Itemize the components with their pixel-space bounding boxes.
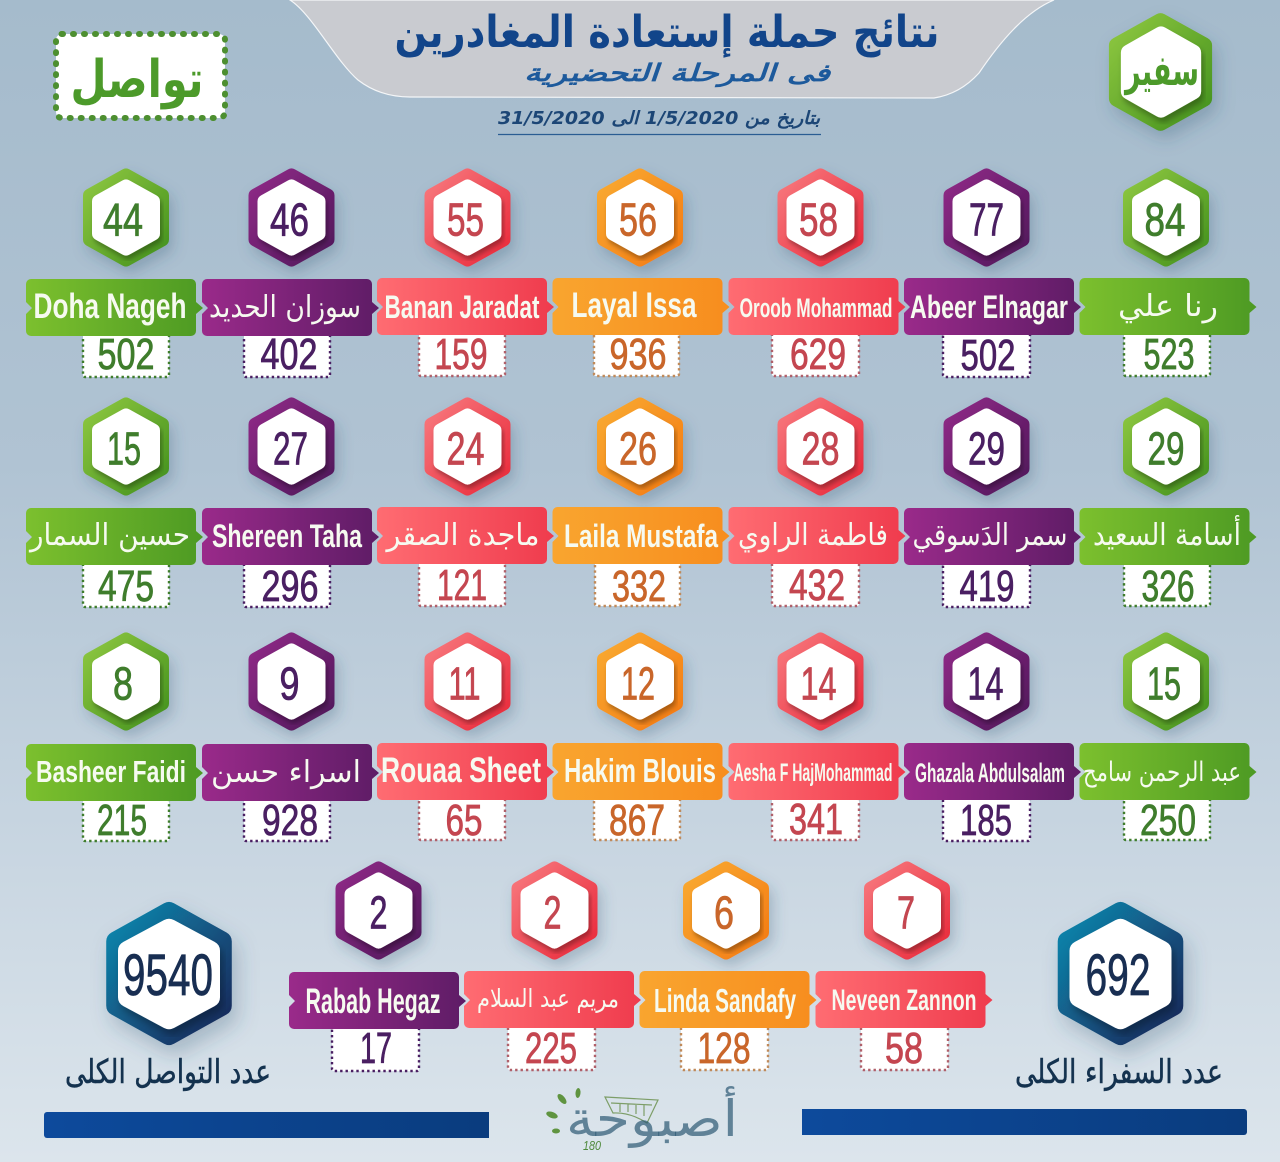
card: Abeer Elnagar — [904, 176, 1081, 380]
count box: 296 — [244, 556, 330, 611]
name ribbon: Aesha F HajMohammad: Aesha F HajMohammad — [734, 759, 892, 787]
row 4 — [289, 868, 992, 1073]
name ribbon: Abeer Elnagar — [904, 278, 1081, 335]
rank hexagon: 11: 11 — [448, 658, 480, 710]
card: Oroob Mohammad — [728, 176, 906, 379]
name ribbon: Rabab Hegaz — [289, 972, 466, 1029]
name ribbon: Neveen Zannon: Neveen Zannon — [832, 984, 976, 1017]
count box: 928 — [244, 790, 330, 845]
count box: 159: 159 — [434, 330, 488, 379]
rank hexagon: 2 — [342, 868, 414, 952]
row 3 — [26, 640, 1256, 845]
name ribbon: Doha Nageh — [26, 279, 203, 336]
logo wordmark: أصبوحة — [566, 1086, 738, 1148]
count box: 419: 419 — [960, 562, 1014, 611]
count box: 65: 65 — [446, 796, 482, 845]
card: Israa Hassan — [202, 640, 379, 845]
name ribbon: Basheer Faidi: Basheer Faidi — [36, 754, 186, 789]
card: Rouaa Sheet — [377, 640, 554, 845]
rank hexagon: 9: 9 — [280, 658, 300, 710]
name ribbon: Layal Issa: Layal Issa — [572, 286, 697, 325]
rank hexagon: 46: 46 — [270, 194, 309, 246]
count box: 17: 17 — [360, 1024, 392, 1073]
rank hexagon: 2 — [518, 868, 590, 952]
rank hexagon: 15 — [1130, 640, 1202, 724]
rank hexagon: 56 — [604, 176, 676, 260]
card: Hussein Alsammar — [26, 404, 203, 611]
card: Abdulrahman Sameh — [1080, 640, 1256, 845]
name ribbon: Rouaa Sheet — [377, 743, 554, 800]
count box: 629: 629 — [790, 330, 846, 379]
rank hexagon: 26: 26 — [619, 422, 657, 474]
rank hexagon: 24: 24 — [446, 422, 484, 474]
name ribbon: Osama Alsaeed — [1080, 508, 1256, 565]
rank hexagon: 12 — [604, 640, 676, 724]
name ribbon: Abeer Elnagar: Abeer Elnagar — [910, 289, 1068, 325]
total hexagon: 9540 — [116, 912, 222, 1035]
name ribbon: Oroob Mohammad: Oroob Mohammad — [740, 293, 892, 323]
count box: 185: 185 — [960, 796, 1012, 845]
count box: 58: 58 — [885, 1024, 923, 1073]
card: Basheer Faidi — [26, 640, 203, 845]
count box: 215: 215 — [97, 796, 147, 845]
card: Laila Mustafa — [552, 404, 730, 611]
name ribbon: Maryam Abdulsalam — [464, 971, 641, 1028]
rank hexagon: 29: 29 — [968, 422, 1005, 474]
rank hexagon: 58 — [784, 176, 856, 260]
rank hexagon: 77 — [950, 176, 1022, 260]
rank hexagon: 84: 84 — [1144, 194, 1186, 246]
name ribbon: Abdulrahman Sameh: عبد الرحمن سامح — [1083, 757, 1241, 788]
count box: 326 — [1124, 556, 1210, 611]
row 2 — [26, 404, 1256, 611]
name ribbon: Israa Hassan: اسراء حسن — [211, 755, 361, 790]
name ribbon: Shereen Taha: Shereen Taha — [212, 518, 362, 554]
date range: بتاريخ من 1/5/2020 الى 31/5/2020 — [498, 108, 821, 129]
card: Doha Nageh — [26, 176, 203, 379]
total hexagon: 692 — [1068, 912, 1173, 1035]
name ribbon: Samar Aldesouqi: سمر الدَسوقي — [912, 518, 1068, 553]
rank hexagon: 56: 56 — [619, 194, 657, 246]
name ribbon: Ghazala Abdulsalam — [904, 743, 1081, 800]
name ribbon: Basheer Faidi — [26, 744, 203, 801]
rank hexagon: 28 — [784, 404, 856, 488]
rank hexagon: 7 — [871, 868, 943, 952]
rank hexagon: 14 — [950, 640, 1022, 724]
card: Suzan — [202, 176, 379, 379]
name ribbon: Linda Sandafy — [640, 971, 816, 1028]
logo — [545, 1086, 738, 1153]
name ribbon: Fatima Alrawi: فاطمة الراوي — [738, 518, 888, 553]
rank hexagon: 28: 28 — [802, 422, 840, 474]
badge: safeer — [1117, 22, 1204, 122]
icon: leaves — [545, 1088, 581, 1134]
count box: 17 — [332, 1020, 419, 1073]
count box: 296: 296 — [262, 562, 318, 611]
card: Samar Aldesouqi — [904, 404, 1081, 611]
rank hexagon: 24 — [432, 404, 504, 488]
name ribbon: Shereen Taha — [202, 508, 379, 565]
card: Linda Sandafy — [640, 868, 816, 1073]
rank hexagon: 29: 29 — [1148, 422, 1184, 474]
row 1 — [26, 176, 1256, 380]
count box: 121: 121 — [437, 561, 487, 610]
card: Layal Issa — [552, 176, 730, 379]
total hexagon: 9540: 9540 — [123, 943, 213, 1008]
name ribbon: Rabab Hegaz: Rabab Hegaz — [306, 982, 440, 1021]
card: Ghazala Abdulsalam — [904, 640, 1081, 845]
badge: tawasol: تواصل — [70, 50, 204, 110]
total caption: عدد السفراء الكلى — [1015, 1052, 1223, 1091]
total caption: عدد التواصل الكلى — [65, 1052, 271, 1091]
rank hexagon: 27 — [256, 404, 328, 488]
name ribbon: Hussein Alsammar — [26, 508, 203, 565]
card: Aesha F HajMohammad — [728, 640, 906, 844]
name ribbon: Maryam Abdulsalam: مريم عبد السلام — [477, 984, 619, 1014]
count box: 432: 432 — [789, 561, 845, 610]
rank hexagon: 6 — [690, 868, 762, 952]
count box: 332 — [595, 556, 680, 611]
badge: tawasol — [56, 34, 225, 118]
title: نتائج حملة إستعادة المغادرين — [394, 7, 940, 58]
count box: 502: 502 — [98, 330, 154, 379]
count box: 65 — [419, 790, 505, 845]
card: Osama Alsaeed — [1080, 404, 1256, 611]
count box: 936: 936 — [610, 330, 666, 379]
rank hexagon: 44 — [90, 176, 162, 260]
card: Banan Jaradat — [377, 176, 554, 379]
name ribbon: Neveen Zannon — [816, 971, 992, 1028]
total: contacts — [65, 912, 271, 1091]
rank hexagon: 12: 12 — [621, 658, 655, 710]
card: Fatima Alrawi — [728, 404, 906, 610]
total: ambassadors — [1015, 912, 1223, 1091]
icon: open book — [605, 1097, 658, 1123]
rank hexagon: 77: 77 — [969, 194, 1004, 246]
name ribbon: Hakim Blouis: Hakim Blouis — [564, 752, 716, 789]
count box: 523: 523 — [1144, 330, 1194, 379]
name ribbon: Banan Jaradat — [377, 278, 554, 335]
rank hexagon: 29 — [1130, 404, 1202, 488]
count box: 502 — [943, 326, 1030, 380]
rank hexagon: 6: 6 — [714, 886, 734, 938]
rank hexagon: 26 — [604, 404, 676, 488]
rank hexagon: 14: 14 — [968, 658, 1004, 710]
rank hexagon: 11 — [432, 640, 504, 724]
name ribbon: Rana Ali — [1080, 278, 1256, 335]
name ribbon: Suzan: سوزان الحديد — [209, 290, 361, 325]
rank hexagon: 44: 44 — [103, 194, 143, 246]
name ribbon: Hakim Blouis — [552, 743, 730, 800]
count box: 185 — [943, 790, 1030, 845]
rank hexagon: 14: 14 — [800, 658, 836, 710]
name ribbon: Rouaa Sheet: Rouaa Sheet — [381, 751, 541, 790]
name ribbon: Banan Jaradat: Banan Jaradat — [384, 289, 540, 325]
total hexagon: 692: 692 — [1086, 943, 1150, 1008]
name ribbon: Oroob Mohammad — [728, 278, 906, 335]
rank hexagon: 8: 8 — [113, 658, 133, 710]
name ribbon: Doha Nageh: Doha Nageh — [34, 287, 186, 326]
rank hexagon: 55 — [432, 176, 504, 260]
rank hexagon: 14 — [784, 640, 856, 724]
count box: 928: 928 — [262, 796, 318, 845]
name ribbon: Majida Alsaqr: ماجدة الصقر — [385, 518, 540, 553]
name ribbon: Israa Hassan — [202, 744, 379, 801]
name ribbon: Osama Alsaeed: أسامة السعيد — [1093, 514, 1241, 553]
count box: 332: 332 — [612, 562, 666, 611]
footer bar left — [44, 1112, 489, 1138]
card: Rabab Hegaz — [289, 868, 466, 1073]
rank hexagon: 15: 15 — [1147, 658, 1181, 710]
count box: 402: 402 — [260, 330, 318, 379]
count box: 475: 475 — [98, 562, 154, 611]
name ribbon: Abdulrahman Sameh — [1080, 743, 1256, 800]
count box: 523 — [1124, 326, 1210, 379]
rank hexagon: 29 — [950, 404, 1022, 488]
card: Majida Alsaqr — [377, 404, 554, 610]
rank hexagon: 15: 15 — [107, 422, 141, 474]
rank hexagon: 55: 55 — [447, 194, 484, 246]
badge: safeer: سفير — [1124, 46, 1199, 96]
name ribbon: Linda Sandafy: Linda Sandafy — [654, 982, 796, 1019]
card: Hakim Blouis — [552, 640, 730, 845]
card: Maryam Abdulsalam — [464, 868, 641, 1073]
count box: 502: 502 — [960, 331, 1016, 380]
rank hexagon: 84 — [1130, 176, 1202, 260]
name ribbon: Laila Mustafa — [552, 507, 730, 564]
card: Neveen Zannon — [816, 868, 992, 1073]
count box: 128: 128 — [698, 1024, 750, 1073]
footer bar right — [802, 1109, 1247, 1135]
name ribbon: Laila Mustafa: Laila Mustafa — [564, 518, 718, 554]
name ribbon: Majida Alsaqr — [377, 507, 554, 564]
name ribbon: Ghazala Abdulsalam: Ghazala Abdulsalam — [915, 758, 1065, 788]
rank hexagon: 15 — [90, 404, 162, 488]
title banner — [290, 0, 1054, 98]
count box: 225: 225 — [525, 1024, 577, 1073]
count box: 58 — [861, 1020, 948, 1073]
count box: 121 — [419, 556, 505, 610]
count box: 250: 250 — [1140, 796, 1196, 845]
rank hexagon: 27: 27 — [273, 422, 308, 474]
name ribbon: Layal Issa — [552, 278, 730, 335]
name ribbon: Fatima Alrawi — [728, 507, 906, 564]
rank hexagon: 7: 7 — [897, 886, 915, 938]
rank hexagon: 58: 58 — [799, 194, 838, 246]
card: Rana Ali — [1080, 176, 1256, 379]
count box: 867: 867 — [609, 796, 665, 845]
rank hexagon: 46 — [256, 176, 328, 260]
name ribbon: Samar Aldesouqi — [904, 508, 1081, 565]
count box: 341: 341 — [789, 795, 843, 844]
name ribbon: Aesha F HajMohammad — [728, 743, 906, 800]
rank hexagon: 2: 2 — [370, 886, 388, 938]
count box: 326: 326 — [1142, 562, 1194, 611]
rank hexagon: 8 — [90, 640, 162, 724]
subtitle: فى المرحلة التحضيرية — [524, 59, 832, 88]
name ribbon: Suzan — [202, 279, 379, 336]
card: Shereen Taha — [202, 404, 379, 611]
rank hexagon: 2: 2 — [544, 886, 562, 938]
rank hexagon: 9 — [256, 640, 328, 724]
name ribbon: Hussein Alsammar: حسين السمار — [28, 518, 190, 553]
logo number: 180 — [583, 1138, 602, 1153]
name ribbon: Rana Ali: رنا علي — [1118, 289, 1218, 324]
